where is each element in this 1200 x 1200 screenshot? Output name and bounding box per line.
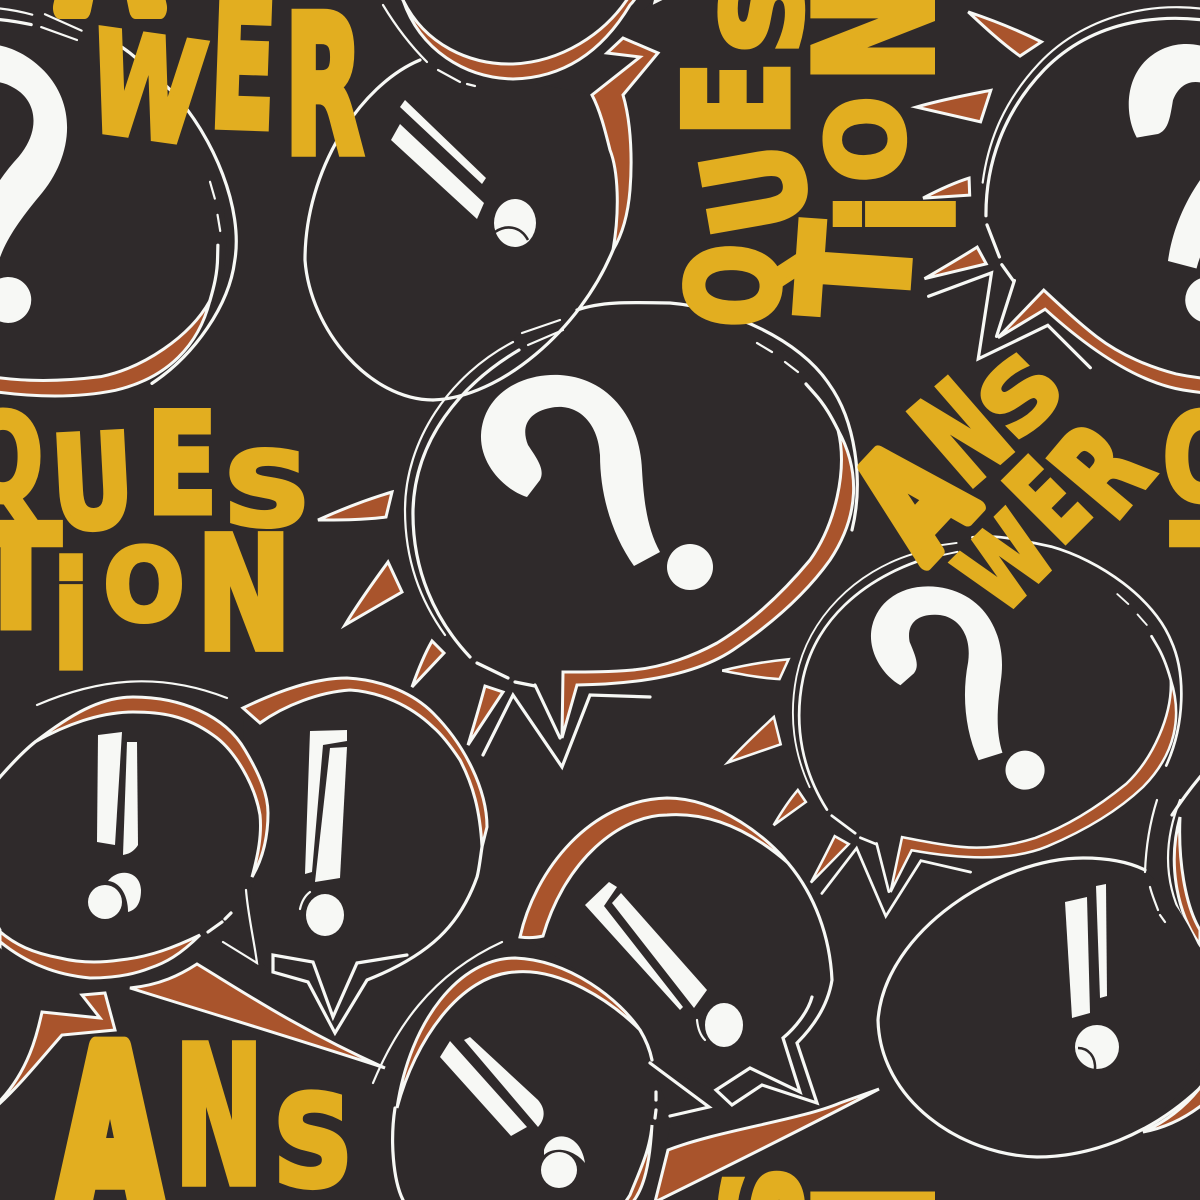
- lettering: WER top: [80, 0, 363, 197]
- lettering: QUESTION vertical: i: [811, 194, 988, 234]
- lettering: QUESTION vertical: [655, 0, 988, 1200]
- lettering: QUESTION left: S: [224, 432, 310, 550]
- lettering: QUESTION vertical: E: [655, 61, 821, 137]
- lettering: QUESTION vertical: T: [766, 218, 947, 323]
- speech bubble: question centre: [318, 303, 858, 767]
- bubble: exclamation right of left pair: [243, 678, 487, 1033]
- lettering: WER top: W: [80, 1, 214, 176]
- lettering: ANSWER diagonal: S: [958, 333, 1085, 460]
- lettering: ANSWER diagonal: A: [823, 410, 1006, 589]
- lettering: ANSWER diagonal: N: [887, 354, 1038, 514]
- bubble: exclamation lower right: [878, 800, 1200, 1157]
- speech bubble: question right: [682, 489, 1200, 964]
- lettering: ANSWER diagonal: [823, 333, 1179, 635]
- bubble: exclamation bottom centre: [373, 942, 879, 1200]
- lettering: QUESTION vertical: U: [675, 132, 841, 245]
- lettering: QUESTION left: [0, 383, 1200, 701]
- bubble tail: large rust spike: [130, 964, 385, 1068]
- lettering: QUESTION left: N: [197, 504, 291, 685]
- lettering: QUESTION vertical: Q: [662, 241, 809, 330]
- lettering: ANS bottom left: [59, 0, 353, 1200]
- bubble: exclamation far left: [0, 681, 268, 978]
- lettering: QUESTION left: U: [48, 407, 137, 560]
- bubble outline: top centre bubble line over centre bubble: [433, 250, 613, 400]
- lettering: ANSWER diagonal: W: [936, 493, 1078, 635]
- bubble: exclamation top centre: [305, 38, 658, 400]
- lettering: QUESTION left: i: [53, 533, 89, 701]
- speech bubble: question top left wrapped: [0, 0, 311, 561]
- bubble tail: wrapped lower right tail at left edge: [0, 993, 115, 1105]
- lettering: QUESTION left: O: [104, 528, 184, 645]
- lettering: QUESTION vertical: O: [805, 94, 930, 184]
- lettering: QUESTION left: E: [147, 383, 217, 545]
- bubble: exclamation left edge wrapped copy: [1168, 681, 1200, 978]
- speech bubble: question top right: [800, 0, 1200, 561]
- lettering: ANSWER diagonal: E: [983, 436, 1114, 567]
- bubble: exclamation bottom tile top copy: [373, 0, 879, 86]
- bubble: exclamation lower centre: [520, 798, 832, 1105]
- lettering: ANSWER diagonal: R: [1025, 398, 1179, 543]
